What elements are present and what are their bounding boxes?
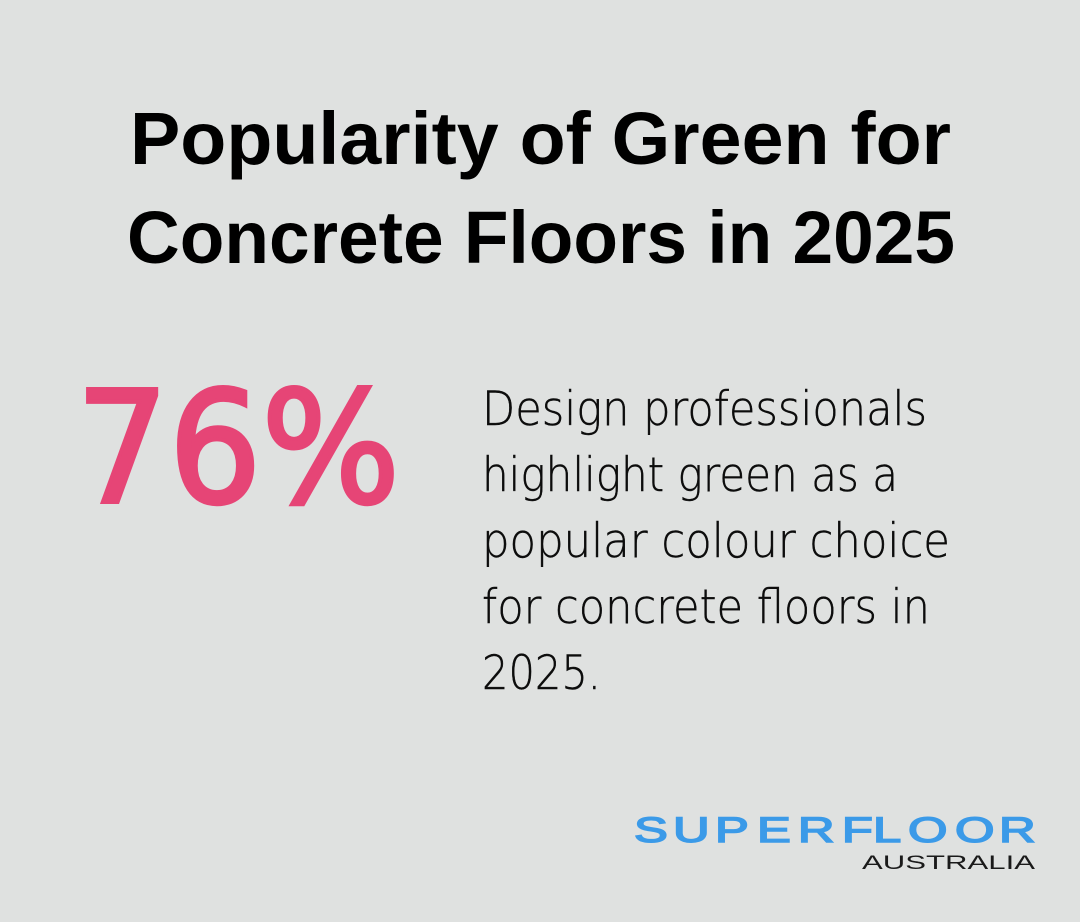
- description text: popular colour choice: [482, 514, 950, 569]
- description text: [482, 382, 950, 701]
- statistic: 76%: 76%: [76, 358, 400, 539]
- description text: Design professionals: [482, 382, 927, 437]
- title: [127, 97, 955, 279]
- title: Concrete Floors in 2025: [127, 196, 955, 279]
- title: Popularity of Green for: [130, 97, 951, 180]
- logo subtitle: AUSTRALIA: [862, 853, 1036, 874]
- description text: 2025.: [482, 646, 601, 701]
- logo: Superfloor Australia: [634, 812, 1036, 874]
- logo wordmark: SUPERFLOOR: [634, 812, 1036, 850]
- description text: for concrete floors in: [482, 580, 930, 635]
- description text: highlight green as a: [482, 448, 898, 503]
